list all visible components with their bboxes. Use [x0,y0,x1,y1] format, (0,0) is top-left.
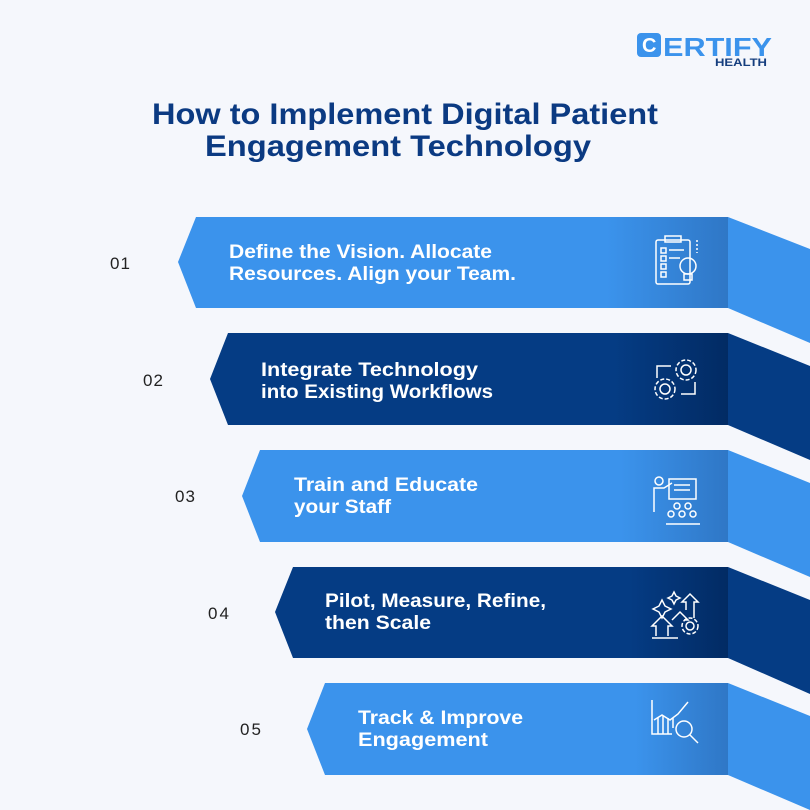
step 04: 04 [208,604,231,623]
icon: chart magnifier [652,700,698,743]
step 05: Track & Improve [358,708,523,729]
step 04: Pilot, Measure, Refine, [325,591,546,612]
step 05 [240,683,810,810]
icon: gears [655,360,696,399]
step 03: your Staff [294,497,392,518]
step 02: into Existing Workflows [261,382,493,403]
step 05: Engagement [358,730,489,751]
title: How to Implement Digital Patient [152,98,658,131]
step 02 [143,333,810,460]
step 04: then Scale [325,613,431,634]
title [152,98,658,163]
step 03: 03 [175,487,196,506]
logo: HEALTH [715,57,767,69]
icon: training [654,477,700,524]
step 05: 05 [240,720,263,739]
step 01: 01 [110,254,131,273]
logo: C [642,35,656,57]
step 01: Define the Vision. Allocate [229,242,492,263]
icon: growth arrows [652,592,698,638]
step 01 [110,217,810,343]
step 03: Train and Educate [294,475,478,496]
step 02: Integrate Technology [261,360,478,381]
step 04 [208,567,810,694]
logo: ERTIFY [663,32,772,62]
step 03 [175,450,810,577]
icon: clipboard bulb [656,236,697,284]
step 02: 02 [143,371,164,390]
step 01: Resources. Align your Team. [229,264,516,285]
logo [637,32,772,69]
title: Engagement Technology [205,130,591,163]
